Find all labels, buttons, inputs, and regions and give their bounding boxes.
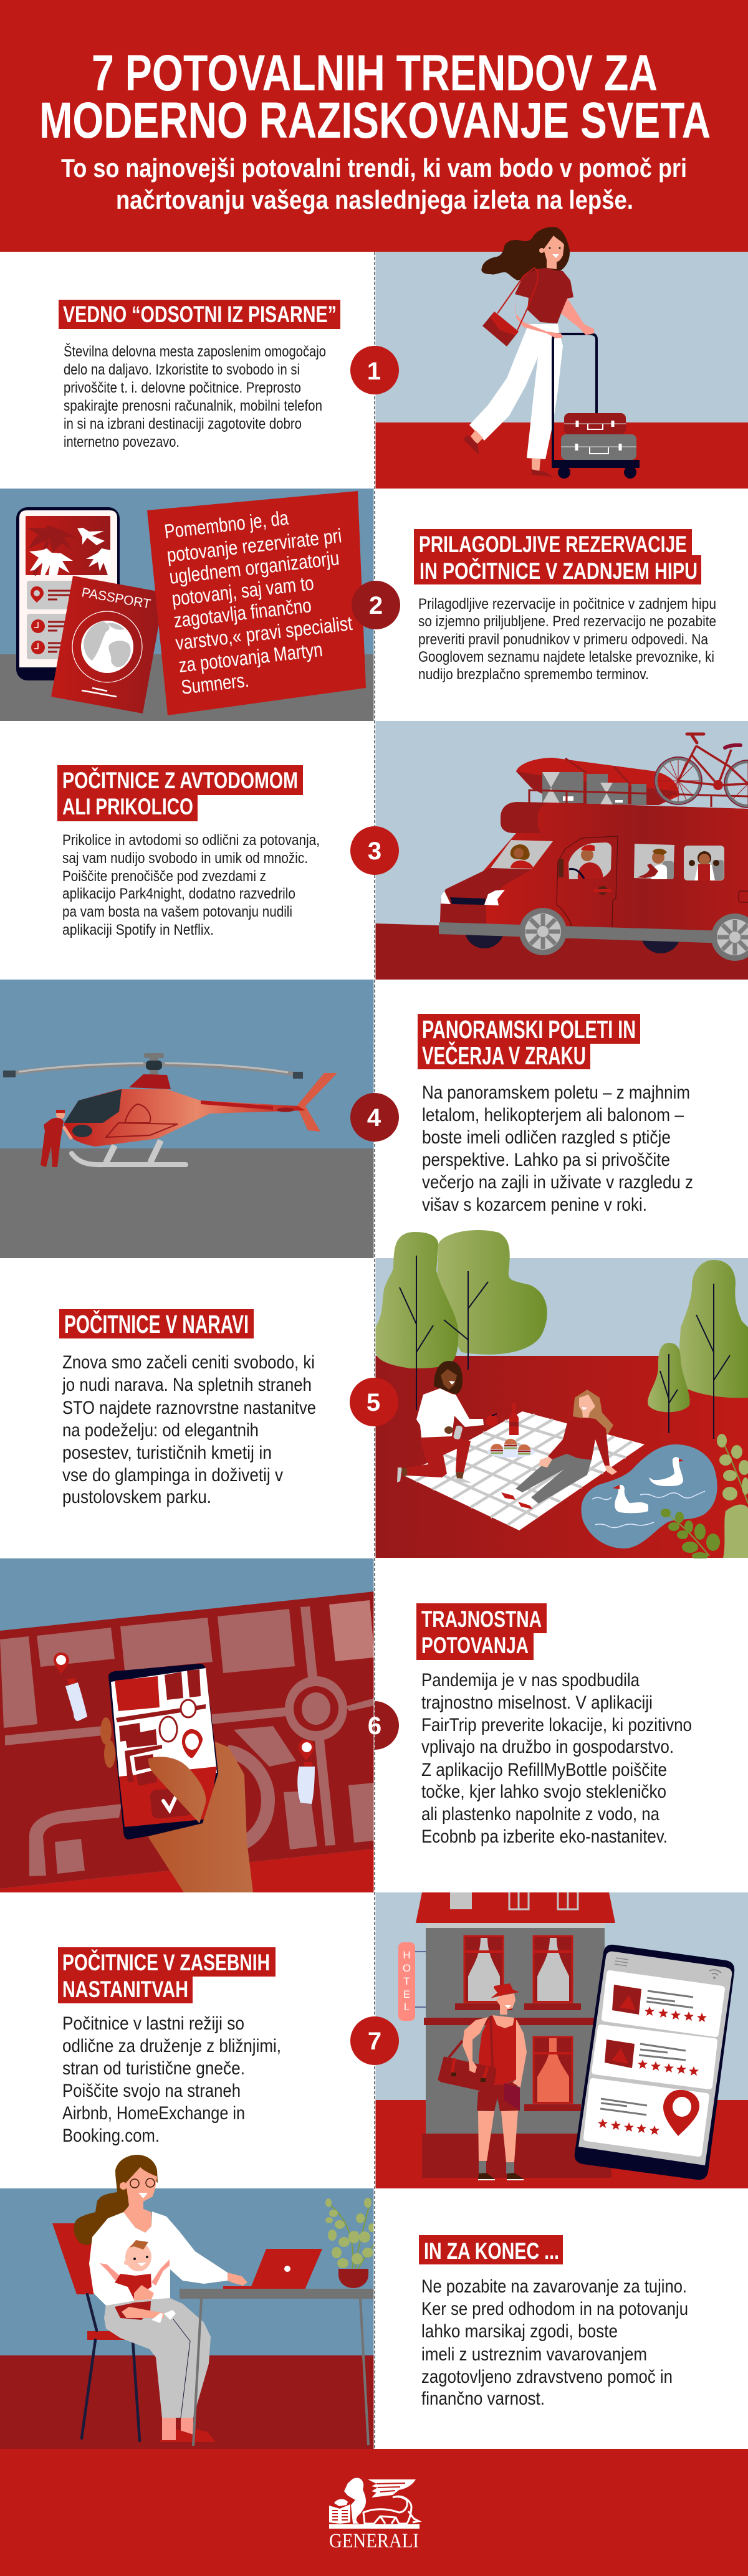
text block: section 5: vse do glampinga in doživetij v (62, 1465, 283, 1486)
text block: section 6 (421, 1670, 692, 1847)
hotel building (416, 1892, 615, 2178)
text block: section 8: Ne pozabite na zavarovanje za tujino. (421, 2276, 687, 2297)
chair (52, 2223, 140, 2441)
number badge 7 (350, 2016, 399, 2065)
number badge 7: 7 (368, 2028, 381, 2055)
callout: quote: Sumners. (180, 669, 250, 699)
text block: section 5 (62, 1352, 316, 1507)
number badge 3: 3 (368, 837, 381, 865)
logo: Generali: GENERALI (329, 2530, 419, 2552)
panel: section 2 text (375, 489, 748, 721)
girl (698, 851, 711, 865)
icon: passport (51, 576, 165, 713)
circle 6 behind map (350, 1701, 399, 1750)
text block: section 7 (62, 2013, 281, 2146)
figure: mechanic (41, 1110, 72, 1167)
roof box (516, 758, 679, 805)
callout: quote: zagotavlja finančno (173, 594, 312, 632)
heading: section 5: POČITNICE V NARAVI (64, 1310, 249, 1338)
icon: phone with map (108, 1664, 224, 1839)
number badge 3 (350, 826, 399, 875)
number badge 4: 4 (367, 1104, 381, 1132)
text block: section 6: Z aplikacijo RefillMyBottle poiščite (421, 1760, 667, 1780)
number badge 1 (350, 346, 399, 394)
text block: section 8: finančno varnost. (421, 2388, 545, 2409)
number badge 5: 5 (367, 1389, 380, 1416)
callout: quote: za potovanja Martyn (178, 638, 324, 677)
text block: section 1 (64, 343, 326, 451)
trees (375, 1230, 748, 1439)
heading: section 4: PANORAMSKI POLETI IN (422, 1015, 636, 1044)
text block: section 2: nudijo brezplačno spremembo terminov. (418, 666, 649, 683)
text block: section 4 (422, 1082, 693, 1215)
text block: section 4: letalom, helikopterjem ali balonom – (422, 1105, 684, 1125)
text block: section 4: višav s kozarcem penine v roki. (422, 1195, 647, 1215)
text block: section 7: Poiščite svojo na straneh (62, 2081, 241, 2101)
figure: woman kneeling (397, 1361, 484, 1483)
title (39, 45, 711, 149)
text block: section 8: lahko marsikaj zgodi, boste (421, 2321, 618, 2342)
heading: section 3 (57, 765, 303, 821)
text block: section 5: pustolovskem parku. (62, 1487, 211, 1507)
panel: section 5 text (0, 1258, 375, 1558)
heading: section 6 (416, 1603, 547, 1660)
hotel sign (398, 1942, 426, 2021)
heading: section 7: POČITNICE V ZASEBNIH (62, 1949, 270, 1975)
text block: section 4: večerjo na zajli in uživate v razgledu z (422, 1172, 693, 1193)
arms (515, 296, 594, 338)
text block: section 5: jo nudi narava. Na spletnih straneh (62, 1375, 312, 1395)
text block: section 8 (421, 2276, 688, 2409)
number badge 4 (350, 1093, 399, 1142)
hotel sign: E (403, 1988, 410, 2000)
picnic blanket (404, 1411, 645, 1530)
text block: section 7: stran od turistične gneče. (62, 2058, 245, 2079)
panel: section 7 illustration hotel (375, 1892, 748, 2188)
text block: section 5: Znova smo začeli ceniti svobodo, ki (62, 1352, 315, 1373)
text block: section 1: in si na izbrani destinaciji zagotovite dobro (64, 416, 302, 432)
icon: laptop (223, 2249, 322, 2289)
text block: section 8: zagotovljeno zdravstveno pomoč in (421, 2367, 673, 2387)
text block: section 1: privoščite t. i. delovne počitnice. Preprosto (64, 379, 301, 396)
text block: section 3: saj vam nudijo svobodo in umik od množic. (62, 850, 308, 867)
wing (368, 2479, 416, 2497)
luggage on roof (529, 772, 748, 807)
heading: section 5 (59, 1309, 254, 1338)
book (329, 2504, 350, 2524)
text block: section 8: Ker se pred odhodom in na potovanju (421, 2299, 688, 2319)
text block: section 7: Booking.com. (62, 2125, 160, 2146)
subtitle (61, 153, 687, 214)
hotel sign: H (403, 1949, 411, 1961)
hair (481, 227, 570, 280)
text block: section 6: ali plastenko napolnite z vodo, na (421, 1804, 659, 1825)
text block: section 1: Številna delovna mesta zaposlenim omogočajo (64, 343, 326, 360)
text block: section 1: internetno povezavo. (64, 434, 180, 451)
panel: section 4 text (375, 980, 748, 1231)
luggage cart (552, 334, 640, 479)
icon: phone (16, 507, 120, 680)
text block: section 6: vplivajo na družbo in gospodarstvo. (421, 1737, 674, 1757)
heading: section 7 (58, 1947, 276, 2003)
text block: section 3: aplikaciji Spotify in Netflix. (62, 922, 214, 938)
icon: potted plant (325, 2198, 375, 2288)
logo: Generali (329, 2478, 420, 2552)
text block: section 2: preveriti pravil ponudnikov v primeru odpovedi. Na (418, 631, 709, 648)
text block: section 8: imeli z ustreznim vavarovanjem (421, 2344, 647, 2365)
heading: section 4: VEČERJA V ZRAKU (422, 1041, 586, 1070)
heading: section 6: POTOVANJA (421, 1633, 529, 1658)
text block: section 7: Počitnice v lastni režiji so (62, 2013, 244, 2034)
icon: hand (100, 1717, 253, 1892)
text block: section 5: posestev, turističnih kmetij in (62, 1443, 272, 1463)
windows with family (491, 840, 724, 880)
text block: section 1: spakirajte prenosni računalnik, mobilni telefon (64, 398, 322, 414)
hotel sign: T (403, 1975, 410, 1987)
text block: section 6: Ecobnb pa izberite eko-nastanitev. (421, 1826, 668, 1847)
text block: section 7: Airbnb, HomeExchange in (62, 2103, 245, 2124)
number badge 6 (368, 1701, 399, 1750)
text block: section 7: odlične za druženje z bližnjimi, (62, 2036, 281, 2056)
icon: pin and bottle right (297, 1740, 315, 1804)
lion (344, 2478, 366, 2524)
icon: bicycle (654, 734, 748, 808)
text block: section 2 (418, 596, 716, 683)
van body (439, 802, 748, 944)
shoes (471, 430, 540, 474)
callout: quote: varstvo,« pravi specialist (175, 612, 353, 654)
wheels (519, 908, 748, 961)
heading: section 8 (419, 2235, 563, 2264)
text block: section 6: točke, kjer lahko svojo stekleničko (421, 1782, 666, 1802)
footer (0, 2449, 748, 2576)
base bar (329, 2524, 420, 2529)
icon: booking phone (575, 1945, 734, 2180)
heading: section 1: VEDNO “ODSOTNI IZ PISARNE” (63, 302, 337, 327)
bag (482, 312, 519, 346)
heading: section 6: TRAJNOSTNA (421, 1606, 542, 1632)
callout: quote: uglednem organizatorju (168, 546, 340, 588)
callout: quote (147, 491, 366, 715)
text block: section 3: Prikolice in avtodomi so odlični za potovanja, (62, 832, 320, 849)
text block: section 5: na podeželju: od elegantnih (62, 1420, 259, 1441)
driver (581, 849, 593, 861)
pond with swans (581, 1444, 717, 1548)
heading: section 2 (414, 529, 701, 584)
panel: section 2 illustration (0, 489, 375, 721)
text block: section 6: Pandemija je v nas spodbudila (421, 1670, 640, 1691)
callout: quote: Pomembno je, da (163, 507, 290, 543)
text block: section 4: perspektive. Lahko pa si privoščite (422, 1150, 670, 1170)
heading: section 1 (59, 300, 340, 329)
figure: woman sitting (501, 1390, 617, 1509)
hotel sign: L (404, 2001, 410, 2013)
icon: helicopter (3, 1053, 337, 1165)
panel: section 6 text (375, 1558, 748, 1892)
heading: section 4 (418, 1014, 640, 1070)
heading: section 8: IN ZA KONEC ... (424, 2238, 559, 2264)
text block: section 5: STO najdete raznovrstne nastanitve (62, 1398, 316, 1418)
face (544, 236, 564, 269)
text block: section 3: aplikacijo Park4night, dodatno razvedrilo (62, 885, 295, 902)
text block: section 1: delo na daljavo. Izkoristite to svobodo in si (64, 361, 300, 378)
boy with dog (652, 851, 664, 864)
hotel sign: O (403, 1962, 411, 1974)
figure: baby (100, 2240, 176, 2323)
number badge 6: 6 (368, 1712, 381, 1740)
illustration: traveller with suitcases (463, 227, 640, 479)
number badge 2 (352, 581, 400, 629)
panel: section 8 illustration mother and baby (0, 2155, 375, 2449)
callout: quote: potovanj, saj vam to (171, 571, 315, 610)
text block: section 3: pa vam bosta na vašem potovanju nudili (62, 904, 292, 920)
panel: section 5 illustration picnic (375, 1230, 748, 1560)
heading: section 3: ALI PRIKOLICO (62, 794, 193, 819)
desk (180, 2289, 375, 2446)
divider dashed line (374, 252, 375, 2449)
icon: pin and bottle left (54, 1653, 87, 1721)
heading: section 3: POČITNICE Z AVTODOMOM (62, 767, 298, 793)
panel: section 3 illustration camper van (375, 721, 748, 980)
text block: section 4: Na panoramskem poletu – z majhnim (422, 1082, 690, 1103)
panel: section 1 text (0, 252, 375, 489)
number badge 2: 2 (369, 592, 383, 619)
van wheel arches (464, 928, 681, 953)
text block: section 6: trajnostno miselnost. V aplikaciji (421, 1692, 653, 1713)
text block: section 4: boste imeli odličen razgled s ptičje (422, 1127, 671, 1148)
figure: mother (74, 2155, 247, 2442)
panel: section 3 text (0, 721, 375, 980)
panel: section 8 text (375, 2188, 748, 2449)
panel: section 7 text (0, 1892, 375, 2188)
trousers (469, 324, 563, 459)
figure: man with bag (439, 1983, 527, 2180)
text block: section 3: Poiščite prenočišče pod zvezdami z (62, 868, 266, 885)
callout: quote: potovanje rezervirate pri (166, 524, 343, 566)
subtitle: načrtovanju vašega naslednjega izleta na lepše. (116, 185, 633, 214)
text block: section 6: FairTrip preverite lokacije, ki pozitivno (421, 1715, 692, 1735)
panel: section 4 illustration helicopter (0, 980, 375, 1258)
panel: section 6 illustration map (0, 1558, 399, 1892)
map blocks and roads (0, 1600, 375, 1876)
heading: section 7: NASTANITVAH (62, 1977, 188, 2002)
plants in corner (661, 1434, 748, 1560)
number badge 5 (350, 1378, 398, 1426)
shirt (515, 268, 573, 323)
number badge 1: 1 (367, 358, 381, 385)
icon: passport: PASSPORT (80, 585, 152, 611)
text block: section 3 (62, 832, 320, 938)
passenger woman (511, 844, 530, 860)
panel: section 1 illustration background (375, 252, 748, 489)
food and wine (486, 1403, 535, 1457)
header banner (0, 0, 748, 252)
